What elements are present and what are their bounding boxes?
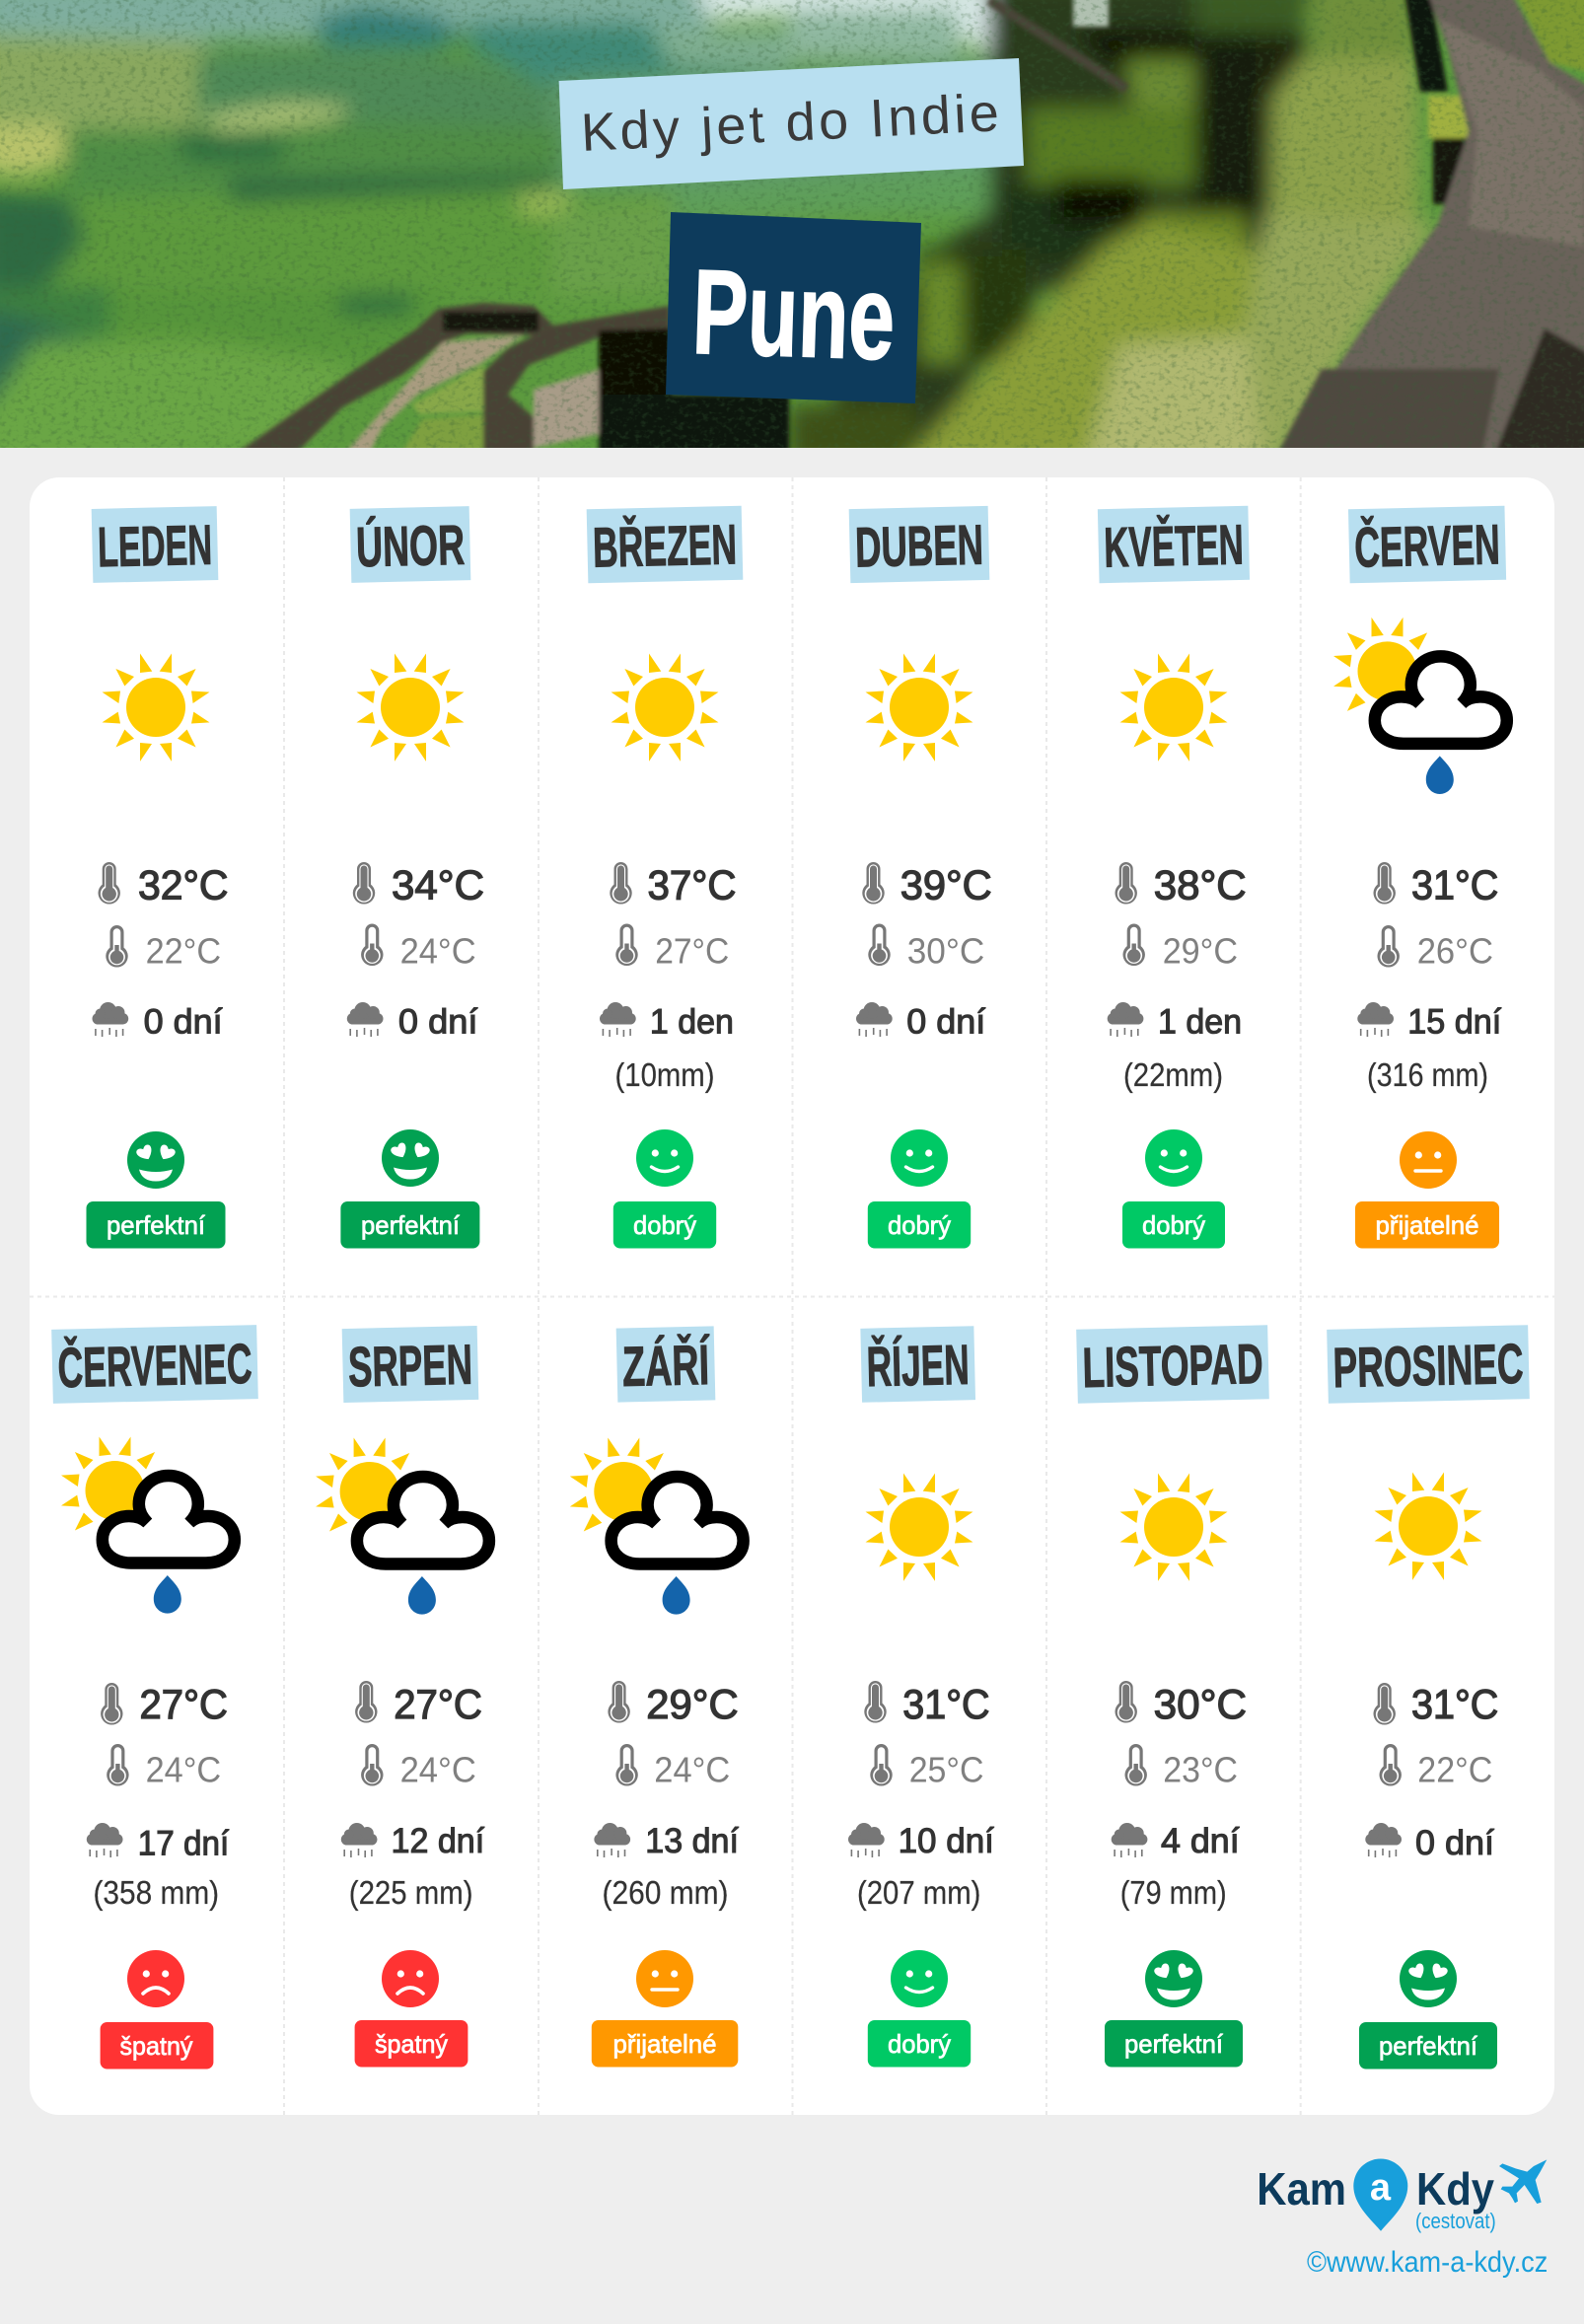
high temperature: 27°C xyxy=(140,1681,228,1727)
month label: LISTOPAD xyxy=(1076,1325,1269,1404)
icon: thermometer low xyxy=(870,1744,893,1786)
rating badge: přijatelné xyxy=(592,2020,738,2068)
high temperature: 31°C xyxy=(1411,1681,1498,1727)
low temperature: 23°C xyxy=(1163,1750,1238,1789)
month label: KVĚTEN: KVĚTEN xyxy=(1104,512,1245,580)
icon: sun xyxy=(1120,653,1227,762)
high temperature: 38°C xyxy=(1154,862,1247,908)
panel: ÚNOR xyxy=(340,506,484,1249)
panel: ZÁŘÍ xyxy=(570,1326,744,2068)
rainfall: (358 mm) xyxy=(93,1874,219,1911)
low temperature: 24°C xyxy=(146,1750,221,1789)
rating badge: perfektní: perfektní xyxy=(361,1210,461,1240)
icon: thermometer high xyxy=(98,862,120,905)
rating badge: dobrý xyxy=(1122,1201,1225,1249)
rating badge: špatný: špatný xyxy=(375,2029,448,2059)
panel: SRPEN xyxy=(316,1326,489,2068)
icon: rating face xyxy=(1145,1129,1202,1187)
icon: thermometer low xyxy=(106,925,128,968)
icon: thermometer low xyxy=(1379,1744,1402,1786)
icon: thermometer high xyxy=(355,1681,377,1723)
icon: thermometer low xyxy=(868,923,891,966)
high temperature: 30°C xyxy=(1154,1681,1247,1727)
rating badge: perfektní xyxy=(340,1201,479,1249)
rainfall: (225 mm) xyxy=(349,1874,473,1911)
rating badge: perfektní: perfektní xyxy=(107,1210,206,1240)
icon: rating face xyxy=(382,1129,439,1187)
rainy days: 0 dní xyxy=(1415,1824,1494,1862)
icon: rain cloud xyxy=(1108,1002,1143,1037)
high temperature: 37°C xyxy=(647,862,736,908)
icon: map pin with letter a xyxy=(1353,2158,1407,2231)
month label: DUBEN: DUBEN xyxy=(854,514,984,579)
month label: BŘEZEN: BŘEZEN xyxy=(592,512,738,580)
icon: thermometer high xyxy=(610,862,632,905)
icon: sun xyxy=(866,653,972,762)
low temperature: 27°C xyxy=(655,931,729,971)
high temperature: 31°C xyxy=(1411,862,1498,908)
icon: rating face xyxy=(1400,1950,1457,2007)
month label: PROSINEC xyxy=(1327,1325,1530,1404)
icon: rain cloud xyxy=(848,1823,885,1857)
icon: rain cloud xyxy=(341,1823,377,1857)
icon: thermometer low xyxy=(615,1744,638,1786)
month label: BŘEZEN xyxy=(587,506,743,583)
panel: ŘÍJEN xyxy=(848,1326,994,2068)
month label: ČERVENEC xyxy=(51,1325,258,1404)
icon: map pin with letter a: a xyxy=(1370,2167,1392,2209)
month label: ŘÍJEN xyxy=(860,1326,975,1403)
icon: sun xyxy=(1375,1472,1481,1580)
month label: ZÁŘÍ xyxy=(616,1326,715,1403)
icon: rating face xyxy=(127,1950,184,2007)
rating badge: dobrý xyxy=(868,2020,971,2068)
rating badge: dobrý: dobrý xyxy=(888,1210,951,1240)
icon: rating face xyxy=(636,1950,693,2007)
panel: LEDEN xyxy=(87,506,229,1249)
rainfall: (207 mm) xyxy=(857,1874,980,1911)
icon: thermometer high xyxy=(353,862,375,905)
title banner: Kdy jet do Indie xyxy=(559,58,1024,189)
icon: sun behind rain cloud xyxy=(1333,617,1507,794)
icon: sun xyxy=(357,653,464,762)
rating badge: perfektní xyxy=(1359,2022,1497,2070)
icon: thermometer high xyxy=(1373,1683,1396,1725)
month label: ZÁŘÍ: ZÁŘÍ xyxy=(621,1333,711,1399)
logo: Kam a Kdy xyxy=(1257,2158,1548,2279)
icon: thermometer high xyxy=(101,1683,122,1725)
month label: ČERVEN: ČERVEN xyxy=(1354,512,1501,580)
title banner: Kdy jet do Indie: Kdy jet do Indie xyxy=(580,83,1000,163)
rainfall: (260 mm) xyxy=(602,1874,728,1911)
icon: rain cloud xyxy=(87,1823,122,1857)
title banner: Pune xyxy=(666,212,921,403)
icon: rain cloud xyxy=(594,1823,630,1857)
month label: SRPEN xyxy=(342,1326,478,1403)
month label: ÚNOR: ÚNOR xyxy=(355,514,466,579)
icon: sun xyxy=(1120,1474,1227,1581)
rainy days: 0 dní xyxy=(906,1002,986,1042)
icon: thermometer high xyxy=(1373,862,1396,905)
rating badge: přijatelné: přijatelné xyxy=(613,2029,716,2059)
month label: KVĚTEN xyxy=(1098,506,1250,583)
month label: LEDEN xyxy=(92,506,218,583)
high temperature: 31°C xyxy=(902,1681,990,1727)
icon: sun behind rain cloud xyxy=(61,1436,235,1614)
icon: rating face xyxy=(382,1950,439,2007)
panel: ČERVEN xyxy=(1333,506,1507,1249)
rating badge: perfektní xyxy=(87,1201,225,1249)
low temperature: 29°C xyxy=(1163,931,1238,971)
panel: PROSINEC xyxy=(1327,1325,1530,2070)
icon: rain cloud xyxy=(1357,1002,1394,1037)
icon: rating face xyxy=(636,1129,693,1187)
rating badge: perfektní: perfektní xyxy=(1124,2029,1224,2059)
icon: sun xyxy=(612,653,718,762)
logo word: Kdy: Kdy xyxy=(1416,2163,1494,2215)
panel: calendar card xyxy=(30,477,1554,2115)
low temperature: 25°C xyxy=(909,1750,984,1789)
rainy days: 0 dní xyxy=(398,1002,478,1042)
rating badge: dobrý: dobrý xyxy=(888,2029,951,2059)
icon: thermometer low xyxy=(1377,925,1400,968)
rainfall: (22mm) xyxy=(1123,1056,1223,1093)
panel: ČERVENEC xyxy=(51,1325,258,2070)
icon: rain cloud xyxy=(856,1002,893,1037)
high temperature: 27°C xyxy=(394,1681,482,1727)
high temperature: 34°C xyxy=(392,862,484,908)
rating badge: dobrý: dobrý xyxy=(1142,1210,1205,1240)
rating badge: perfektní: perfektní xyxy=(1379,2031,1478,2061)
icon: rain cloud xyxy=(600,1002,636,1037)
panel: BŘEZEN xyxy=(587,506,743,1249)
month label: ČERVENEC: ČERVENEC xyxy=(57,1332,252,1400)
rating badge: dobrý xyxy=(613,1201,716,1249)
website credit: ©www.kam-a-kdy.cz xyxy=(1307,2246,1548,2279)
icon: thermometer low xyxy=(1124,1744,1147,1786)
rainfall: (10mm) xyxy=(615,1056,714,1093)
month label: SRPEN: SRPEN xyxy=(347,1334,473,1399)
low temperature: 22°C xyxy=(146,931,221,971)
rating badge: přijatelné: přijatelné xyxy=(1375,1210,1479,1240)
icon: rating face xyxy=(891,1950,948,2007)
month label: ŘÍJEN: ŘÍJEN xyxy=(866,1333,970,1399)
rainfall: (79 mm) xyxy=(1120,1874,1227,1911)
icon: thermometer low xyxy=(615,923,638,966)
rainy days: 12 dní xyxy=(391,1822,484,1860)
icon: rating face xyxy=(1400,1131,1457,1189)
rainfall: (316 mm) xyxy=(1367,1056,1488,1093)
panel: LISTOPAD xyxy=(1076,1325,1269,2068)
rating badge: perfektní xyxy=(1105,2020,1243,2068)
month label: LISTOPAD: LISTOPAD xyxy=(1082,1333,1263,1400)
month label: DUBEN xyxy=(849,506,989,583)
icon: thermometer low xyxy=(1122,923,1145,966)
rainy days: 10 dní xyxy=(899,1822,994,1860)
rating badge: špatný xyxy=(101,2022,213,2070)
icon: thermometer high xyxy=(1115,1681,1137,1723)
icon: thermometer high xyxy=(864,1681,887,1723)
icon: airplane xyxy=(1499,2159,1547,2204)
icon: thermometer low xyxy=(361,1744,383,1786)
icon: sun behind rain cloud xyxy=(570,1438,744,1615)
low temperature: 24°C xyxy=(400,931,476,971)
icon: rating face xyxy=(127,1131,184,1189)
icon: rain cloud xyxy=(1365,1823,1402,1857)
icon: rain cloud xyxy=(1112,1823,1147,1857)
rating badge: dobrý: dobrý xyxy=(633,1210,696,1240)
icon: thermometer high xyxy=(1115,862,1137,905)
icon: sun xyxy=(866,1474,972,1581)
rainy days: 0 dní xyxy=(144,1002,223,1042)
rainy days: 1 den xyxy=(1158,1002,1242,1042)
rating badge: přijatelné xyxy=(1355,1201,1499,1249)
logo subtitle: (cestovat) xyxy=(1415,2209,1496,2233)
icon: thermometer low xyxy=(361,923,383,966)
icon: sun xyxy=(103,653,209,762)
icon: rating face xyxy=(1145,1950,1202,2007)
title banner: Pune: Pune xyxy=(690,245,897,385)
icon: rain cloud xyxy=(347,1002,383,1037)
icon: rating face xyxy=(891,1129,948,1187)
month label: LEDEN: LEDEN xyxy=(97,514,213,579)
low temperature: 24°C xyxy=(654,1750,730,1789)
rating badge: špatný xyxy=(355,2020,468,2068)
rating badge: dobrý xyxy=(868,1201,971,1249)
icon: thermometer high xyxy=(862,862,885,905)
icon: thermometer low xyxy=(107,1744,129,1786)
logo word: Kam: Kam xyxy=(1257,2163,1346,2215)
low temperature: 26°C xyxy=(1417,931,1493,971)
high temperature: 29°C xyxy=(646,1681,739,1727)
rating badge: špatný: špatný xyxy=(120,2031,193,2061)
panel: DUBEN xyxy=(849,506,992,1249)
rainy days: 17 dní xyxy=(138,1825,229,1862)
rainy days: 15 dní xyxy=(1407,1002,1502,1042)
low temperature: 30°C xyxy=(907,931,984,971)
rainy days: 1 den xyxy=(650,1002,734,1042)
panel: KVĚTEN xyxy=(1098,506,1250,1249)
icon: sun behind rain cloud xyxy=(316,1438,489,1615)
icon: rain cloud xyxy=(93,1002,128,1037)
month label: ČERVEN xyxy=(1348,506,1506,583)
icon: thermometer high xyxy=(608,1681,630,1723)
low temperature: 24°C xyxy=(400,1750,476,1789)
rainy days: 13 dní xyxy=(645,1822,739,1860)
low temperature: 22°C xyxy=(1417,1750,1492,1789)
high temperature: 39°C xyxy=(900,862,992,908)
header photo: valley and fort wall xyxy=(0,0,1584,468)
high temperature: 32°C xyxy=(138,862,229,908)
month label: ÚNOR xyxy=(350,506,470,583)
rainy days: 4 dní xyxy=(1161,1822,1240,1860)
texture on photo xyxy=(0,0,1584,448)
